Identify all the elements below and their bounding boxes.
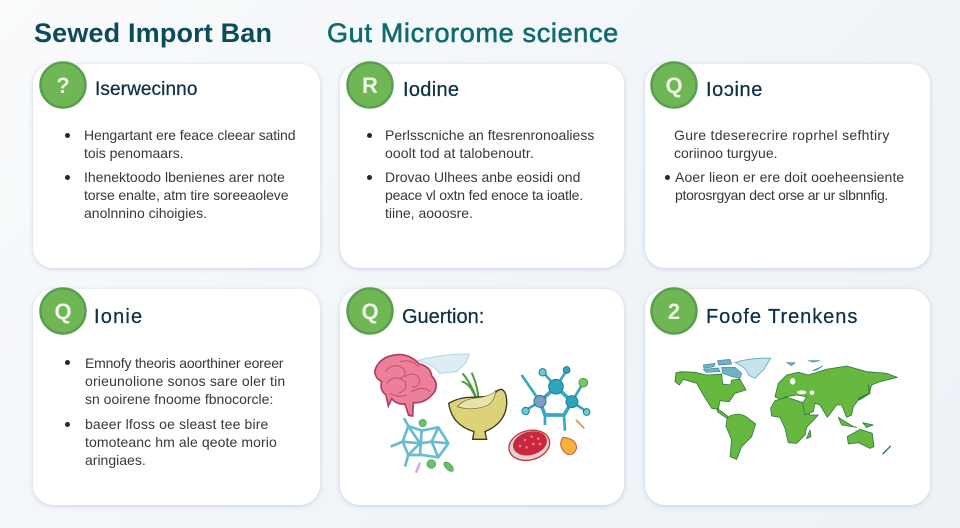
icon: question badge 6 [650,287,698,335]
icon: question badge 3 [650,61,698,109]
heading: card 2: Iodine [403,79,459,101]
icon: question badge 6: 2 [668,299,680,324]
map: greenland [735,358,771,378]
illustration: small fruit [561,437,577,455]
bullet list: card 1 [65,127,295,221]
map: north america [675,372,746,409]
map: madagascar [807,430,811,439]
illustration: pink gut [375,355,436,416]
illustration: pomegranate [506,426,553,465]
bullet list: card 1: Ihenektoodo lbenienes arer note [84,169,285,185]
icon: question badge 1: ? [56,73,70,98]
bullet list: card 4: sn ooirene fnoome fbnocorcle: [85,391,273,407]
panel: card 5 [340,289,624,505]
icon: question badge 2: R [362,73,378,98]
panel: card 4 [33,289,320,505]
illustration: green dots [419,419,455,473]
heading: card 5: Guertion: [402,306,484,328]
heading: card 4: Ionie [94,306,143,328]
bullet list: card 3: Aoer lieon er ere doit ooeheensiente [675,169,904,185]
heading: card 1: Iserwecinno [95,79,197,100]
icon: question badge 2 [346,61,394,109]
map: southeast asia islands [838,417,857,427]
panel: card 6 [645,289,930,505]
bullet list: card 4: orieunolione sonos sare oler tin [85,373,285,389]
icon: question badge 4: Q [54,299,72,324]
bullet list: card 4: baeer lfoss oe sleast tee bire [85,416,268,432]
bullet list: card 3 [665,127,904,203]
map: inland seas [790,378,814,395]
icon: question badge 5 [346,287,394,335]
panel: card 2 [340,64,624,268]
map: arctic islands [703,359,823,379]
bullet list: card 2: Drovao Ulhees anbe eosidi ond [385,169,580,185]
panel: card 1 [33,64,320,268]
illustration: teal network molecule [391,418,448,467]
bullet list: card 3: coriinoo turgyue. [674,145,778,161]
icon: question badge 4 [39,287,87,335]
bullet list: card 1: tois penomaars. [84,145,184,161]
illustration: yellow bowl [449,389,507,439]
bullet list: card 4: tomoteanc hm ale qeote morio [85,434,277,450]
heading: card 3: Ioɔine [706,79,763,101]
map: new zealand [883,446,891,454]
bullet list: card 4 [65,355,285,468]
title: Sewed Import Ban: Sewed Import Ban [34,18,272,48]
heading: card 6: Foofe Trenkens [706,306,858,328]
bullet list: card 2: ooolt tod at talobenoutr. [385,145,534,161]
bullet list: card 2: Perlsscniche an ftesrenronoaliess [385,127,594,143]
chart: world map [674,358,898,460]
map: japan [858,385,870,400]
bullet list: card 3: Gure tdeserecrire roprhel sefhtiry [674,127,890,143]
illustration: green sprout [462,373,479,403]
map: south america [726,414,756,459]
bullet list: card 1: Hengartant ere feace cleear satind [84,127,295,143]
bullet list: card 4: aringiaes. [85,452,146,468]
bullet list: card 2: tiine, aooosre. [385,205,473,221]
bullet list: card 4: Emnofy theoris aoorthiner eoreer [85,355,283,371]
title: Gut Microbiome science: Gut Microrome science [327,18,619,48]
illustration: pale blue cloud [417,354,469,373]
panel: card 3 [645,64,930,268]
bullet list: card 2: peace vl oxtn fed enoce ta ioatle. [385,187,583,203]
icon: question badge 1 [39,61,87,109]
bullet list: card 2 [367,127,594,221]
map: australia [847,429,874,448]
illustration: blue molecule ring [522,367,590,431]
bullet list: card 1: anolnnino cihoigies. [84,205,207,221]
map: eurasia [775,366,897,417]
icon: question badge 5: Q [361,299,379,324]
icon: question badge 3: Q [665,73,683,98]
map: central america [717,408,727,419]
bullet list: card 3: ptorosrgyan dect orse ar ur slbnnfig. [675,187,888,203]
map: africa [771,397,818,443]
bullet list: card 1: torse enalte, atm tire soreeaoleve [84,187,288,203]
